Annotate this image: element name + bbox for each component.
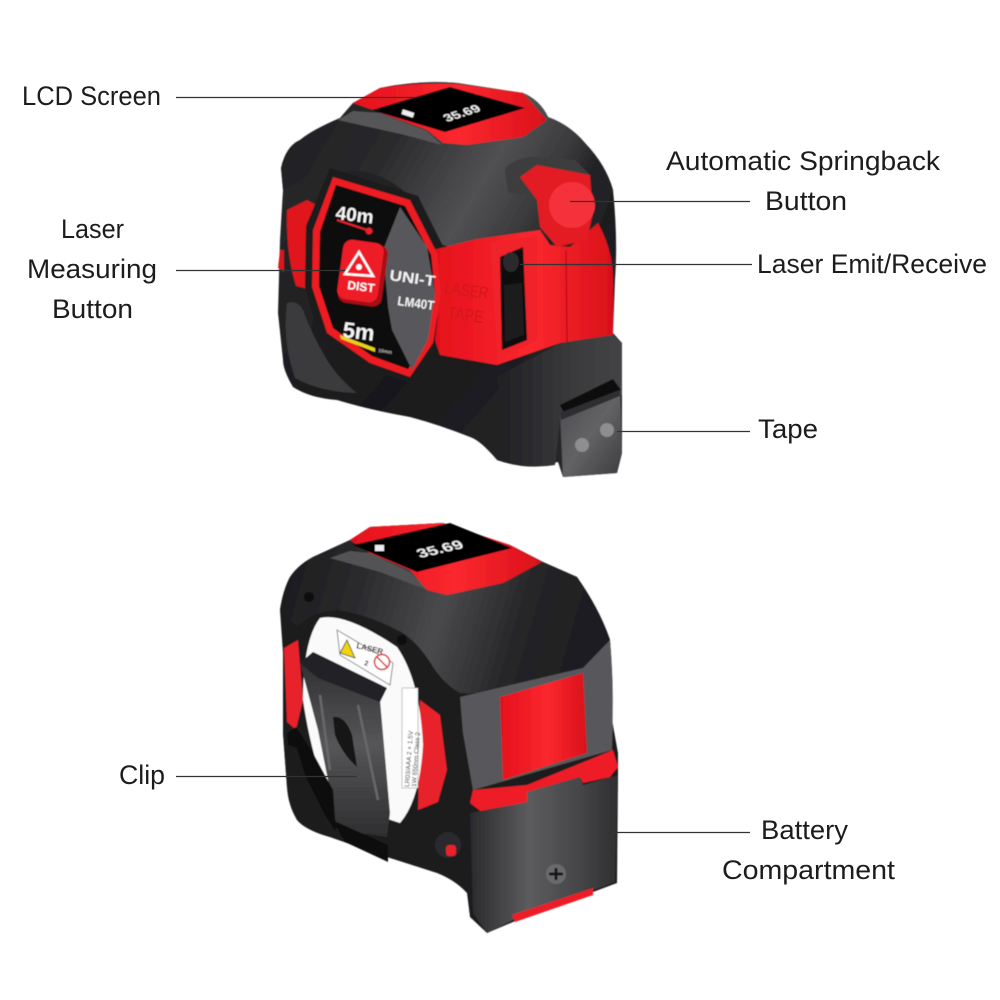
- red top plate: [353, 84, 547, 145]
- side recess dark ring: [283, 612, 470, 872]
- device: laser tape back view: [280, 523, 618, 933]
- tape end hook: [560, 390, 622, 477]
- red nub: [278, 250, 284, 272]
- specification strip: LR03/AAA 2 × 1.5V: [404, 730, 415, 787]
- clip ridges: [320, 695, 378, 800]
- LCD digits: 35.69: [414, 538, 467, 561]
- red laser line: [337, 220, 372, 234]
- label: Battery Compartment: Compartment: [722, 855, 896, 885]
- screw: [546, 864, 566, 884]
- specification strip: 1W 650nm Class 2: [411, 731, 422, 787]
- laser warning label: 2: [364, 660, 369, 668]
- label: Automatic Springback Button: Automatic Springback: [666, 146, 941, 176]
- label: Laser Measuring Button: Laser: [61, 214, 124, 244]
- embossed text: LASER TAPE: LASER: [443, 278, 490, 303]
- upper shell: [280, 523, 610, 693]
- label: Battery Compartment: [607, 815, 896, 885]
- embossed text: LASER TAPE: [443, 278, 490, 327]
- embossed text: LASER TAPE: TAPE: [446, 303, 485, 327]
- white label disc: [303, 617, 423, 823]
- dark rim around face: [305, 168, 448, 384]
- label: Automatic Springback Button: Button: [765, 186, 847, 216]
- tape holder: [497, 335, 622, 467]
- label: Laser Measuring Button: Button: [52, 294, 133, 324]
- black face: [319, 185, 435, 369]
- specification strip: [402, 688, 422, 788]
- label: Laser Measuring Button: [27, 214, 345, 324]
- label: Laser Measuring Button: Measuring: [27, 254, 157, 284]
- LCD battery icon: [401, 109, 414, 118]
- red top plate: [350, 523, 542, 595]
- label: Laser Emit/Receive: Laser Emit/Receive: [757, 249, 987, 279]
- laser warning label: [337, 630, 393, 685]
- clip: [300, 652, 390, 837]
- label: Tape: Tape: [758, 414, 818, 444]
- clip top band: [300, 652, 387, 702]
- DIST button: [336, 239, 389, 308]
- body silhouette: [280, 523, 618, 933]
- red side band: [433, 223, 613, 365]
- DIST button: DIST: [347, 278, 376, 295]
- body silhouette: [278, 82, 622, 477]
- door red strip: [512, 888, 593, 922]
- gray hexagon: [383, 207, 435, 370]
- yellow ruler: [340, 335, 392, 356]
- brand text: UNI-T: [388, 267, 436, 290]
- base slot: [332, 820, 388, 862]
- top recess: [338, 111, 442, 145]
- clip hook: [287, 727, 336, 832]
- label: LCD Screen: LCD Screen: [22, 81, 161, 111]
- LCD battery icon: [375, 545, 384, 551]
- red face rim: [312, 177, 441, 377]
- laser window frame: [490, 236, 537, 360]
- small red button: [435, 832, 461, 858]
- tape slot: [560, 379, 621, 415]
- LCD digits: 35.69: [440, 102, 484, 124]
- LCD screen: [372, 87, 525, 132]
- top recess: [330, 551, 430, 591]
- red ring left: [284, 640, 303, 730]
- red ring right: [418, 700, 447, 810]
- 5m text: 5m: [341, 317, 376, 346]
- LCD screen: [353, 523, 512, 572]
- lower left grip highlight: [286, 302, 357, 393]
- 40m text: 40m: [334, 203, 375, 229]
- brand text: [388, 267, 436, 313]
- red button: [520, 165, 595, 247]
- device: laser tape front view: [278, 82, 622, 477]
- laser emit/receive window: [500, 247, 527, 350]
- gray recess near button: [505, 157, 590, 195]
- clip hole: [333, 717, 357, 767]
- red strip: [470, 750, 618, 813]
- brand text: LM40T: [397, 293, 435, 313]
- red side panel: [500, 673, 587, 780]
- upper shell: [281, 82, 613, 250]
- label: Automatic Springback Button: [570, 146, 941, 216]
- warning triangle icon: [345, 252, 373, 276]
- label: Battery Compartment: Battery: [761, 815, 848, 845]
- screw holes: [304, 592, 407, 645]
- laser warning label: LASER: [356, 641, 384, 657]
- battery compartment door: [470, 775, 618, 933]
- side gray panel: [460, 640, 613, 790]
- band seam: [566, 250, 567, 342]
- yellow ruler: 16mm: [378, 348, 392, 356]
- label: Clip: Clip: [119, 760, 165, 790]
- side handle: [287, 200, 320, 290]
- rivets: [575, 438, 589, 452]
